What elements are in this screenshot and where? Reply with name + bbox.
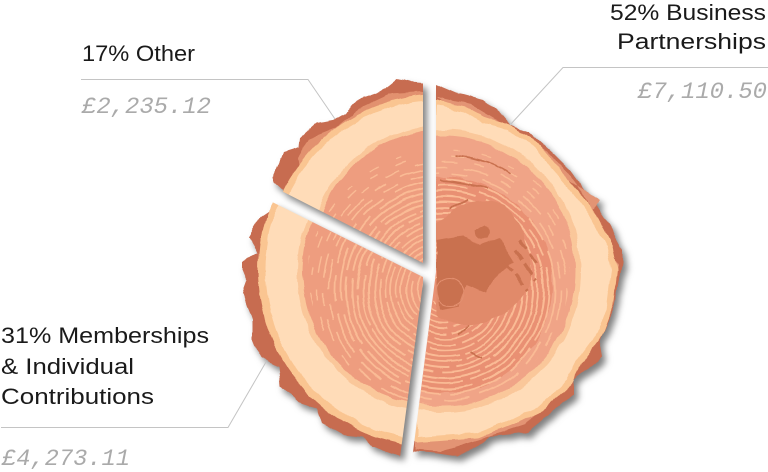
label: 31% memberships and individual contributions: 31% Memberships bbox=[1, 323, 209, 348]
wedge: 17% other bbox=[272, 79, 432, 271]
wedge: 52% business partnerships bbox=[412, 85, 632, 466]
heartwood dark core bbox=[436, 236, 515, 310]
label: 52% business partnerships bbox=[510, 0, 768, 125]
label: 52% business partnerships: Partnerships bbox=[617, 29, 766, 54]
cream sapwood band bbox=[417, 105, 612, 437]
label: 31% memberships and individual contributions: & Individual bbox=[1, 354, 134, 379]
label: 17% other: £2,235.12 bbox=[81, 94, 211, 120]
label: 31% memberships and individual contributions: Contributions bbox=[1, 384, 154, 409]
chart: tree-ring pie bbox=[242, 75, 622, 472]
label: 31% memberships and individual contributions bbox=[1, 323, 266, 472]
label: 52% business partnerships: 52% Business bbox=[610, 0, 766, 25]
wedge: 31% memberships bbox=[242, 202, 432, 464]
heartwood mid zone bbox=[436, 200, 531, 325]
label: 31% memberships and individual contributions: £4,273.11 bbox=[1, 446, 130, 472]
label: 17% other: 17% Other bbox=[82, 41, 195, 66]
label: 52% business partnerships: £7,110.50 bbox=[637, 79, 767, 105]
label: 17% other bbox=[81, 41, 335, 120]
